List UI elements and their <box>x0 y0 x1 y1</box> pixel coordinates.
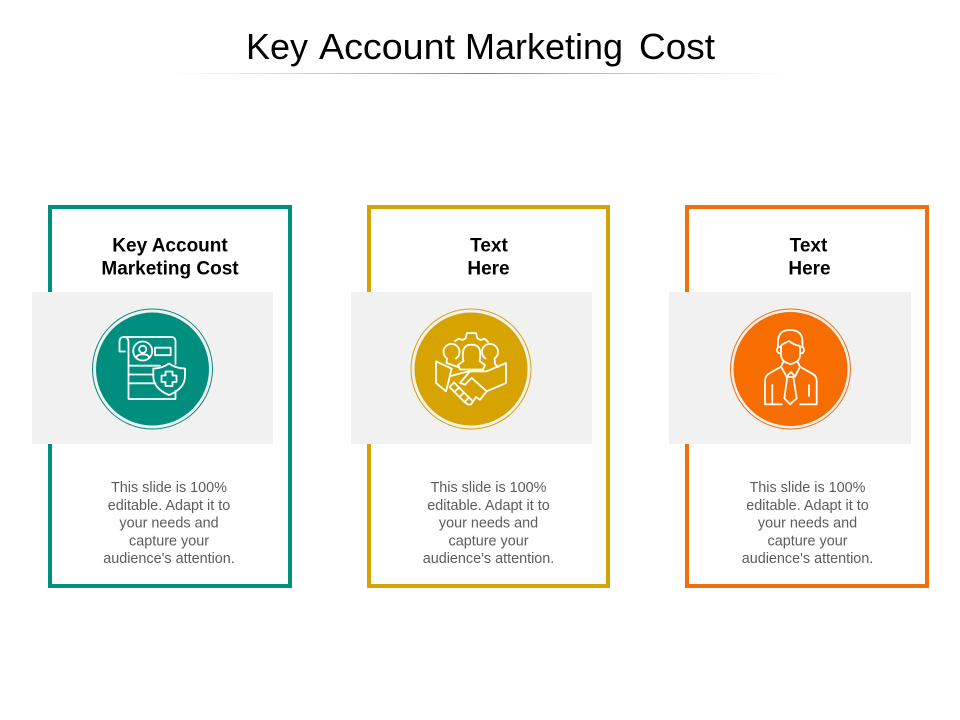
heading: Marketing Cost <box>101 258 239 280</box>
body text: your needs and <box>439 516 538 532</box>
title: Marketing <box>465 26 623 67</box>
body text: audience's attention. <box>423 551 554 567</box>
body text: editable. Adapt it to <box>427 498 550 514</box>
icon: document with shield <box>92 309 212 429</box>
grey band <box>669 292 911 444</box>
icon: businessman with tie <box>730 309 850 429</box>
body text: This slide is 100% <box>750 480 866 496</box>
panel: key account marketing cost <box>32 207 290 586</box>
panel frame <box>369 207 608 586</box>
heading: Text <box>790 236 828 256</box>
body text: capture your <box>129 534 209 550</box>
heading: Text <box>470 236 508 256</box>
grey band <box>32 292 273 444</box>
body text: This slide is 100% <box>111 480 227 496</box>
panel frame <box>687 207 927 586</box>
body text: your needs and <box>119 516 219 532</box>
body text: editable. Adapt it to <box>746 498 869 514</box>
body text: your needs and <box>758 516 857 532</box>
heading: Here <box>788 258 831 280</box>
icon: handshake with team and gear <box>411 309 531 429</box>
heading: Key Account <box>112 236 228 256</box>
panel: text here orange <box>669 207 927 586</box>
body text: editable. Adapt it to <box>108 498 230 514</box>
body text: capture your <box>448 534 529 550</box>
body text: capture your <box>768 534 848 550</box>
body text: This slide is 100% <box>431 480 547 496</box>
panel frame <box>50 207 290 586</box>
body text: audience's attention. <box>742 551 873 567</box>
body text: audience's attention. <box>103 551 235 567</box>
grey band <box>351 292 592 444</box>
title: Account <box>319 26 455 67</box>
heading: Here <box>467 258 510 280</box>
title: Cost <box>639 26 715 67</box>
panel: text here gold <box>351 207 608 586</box>
title: Key <box>246 26 309 67</box>
